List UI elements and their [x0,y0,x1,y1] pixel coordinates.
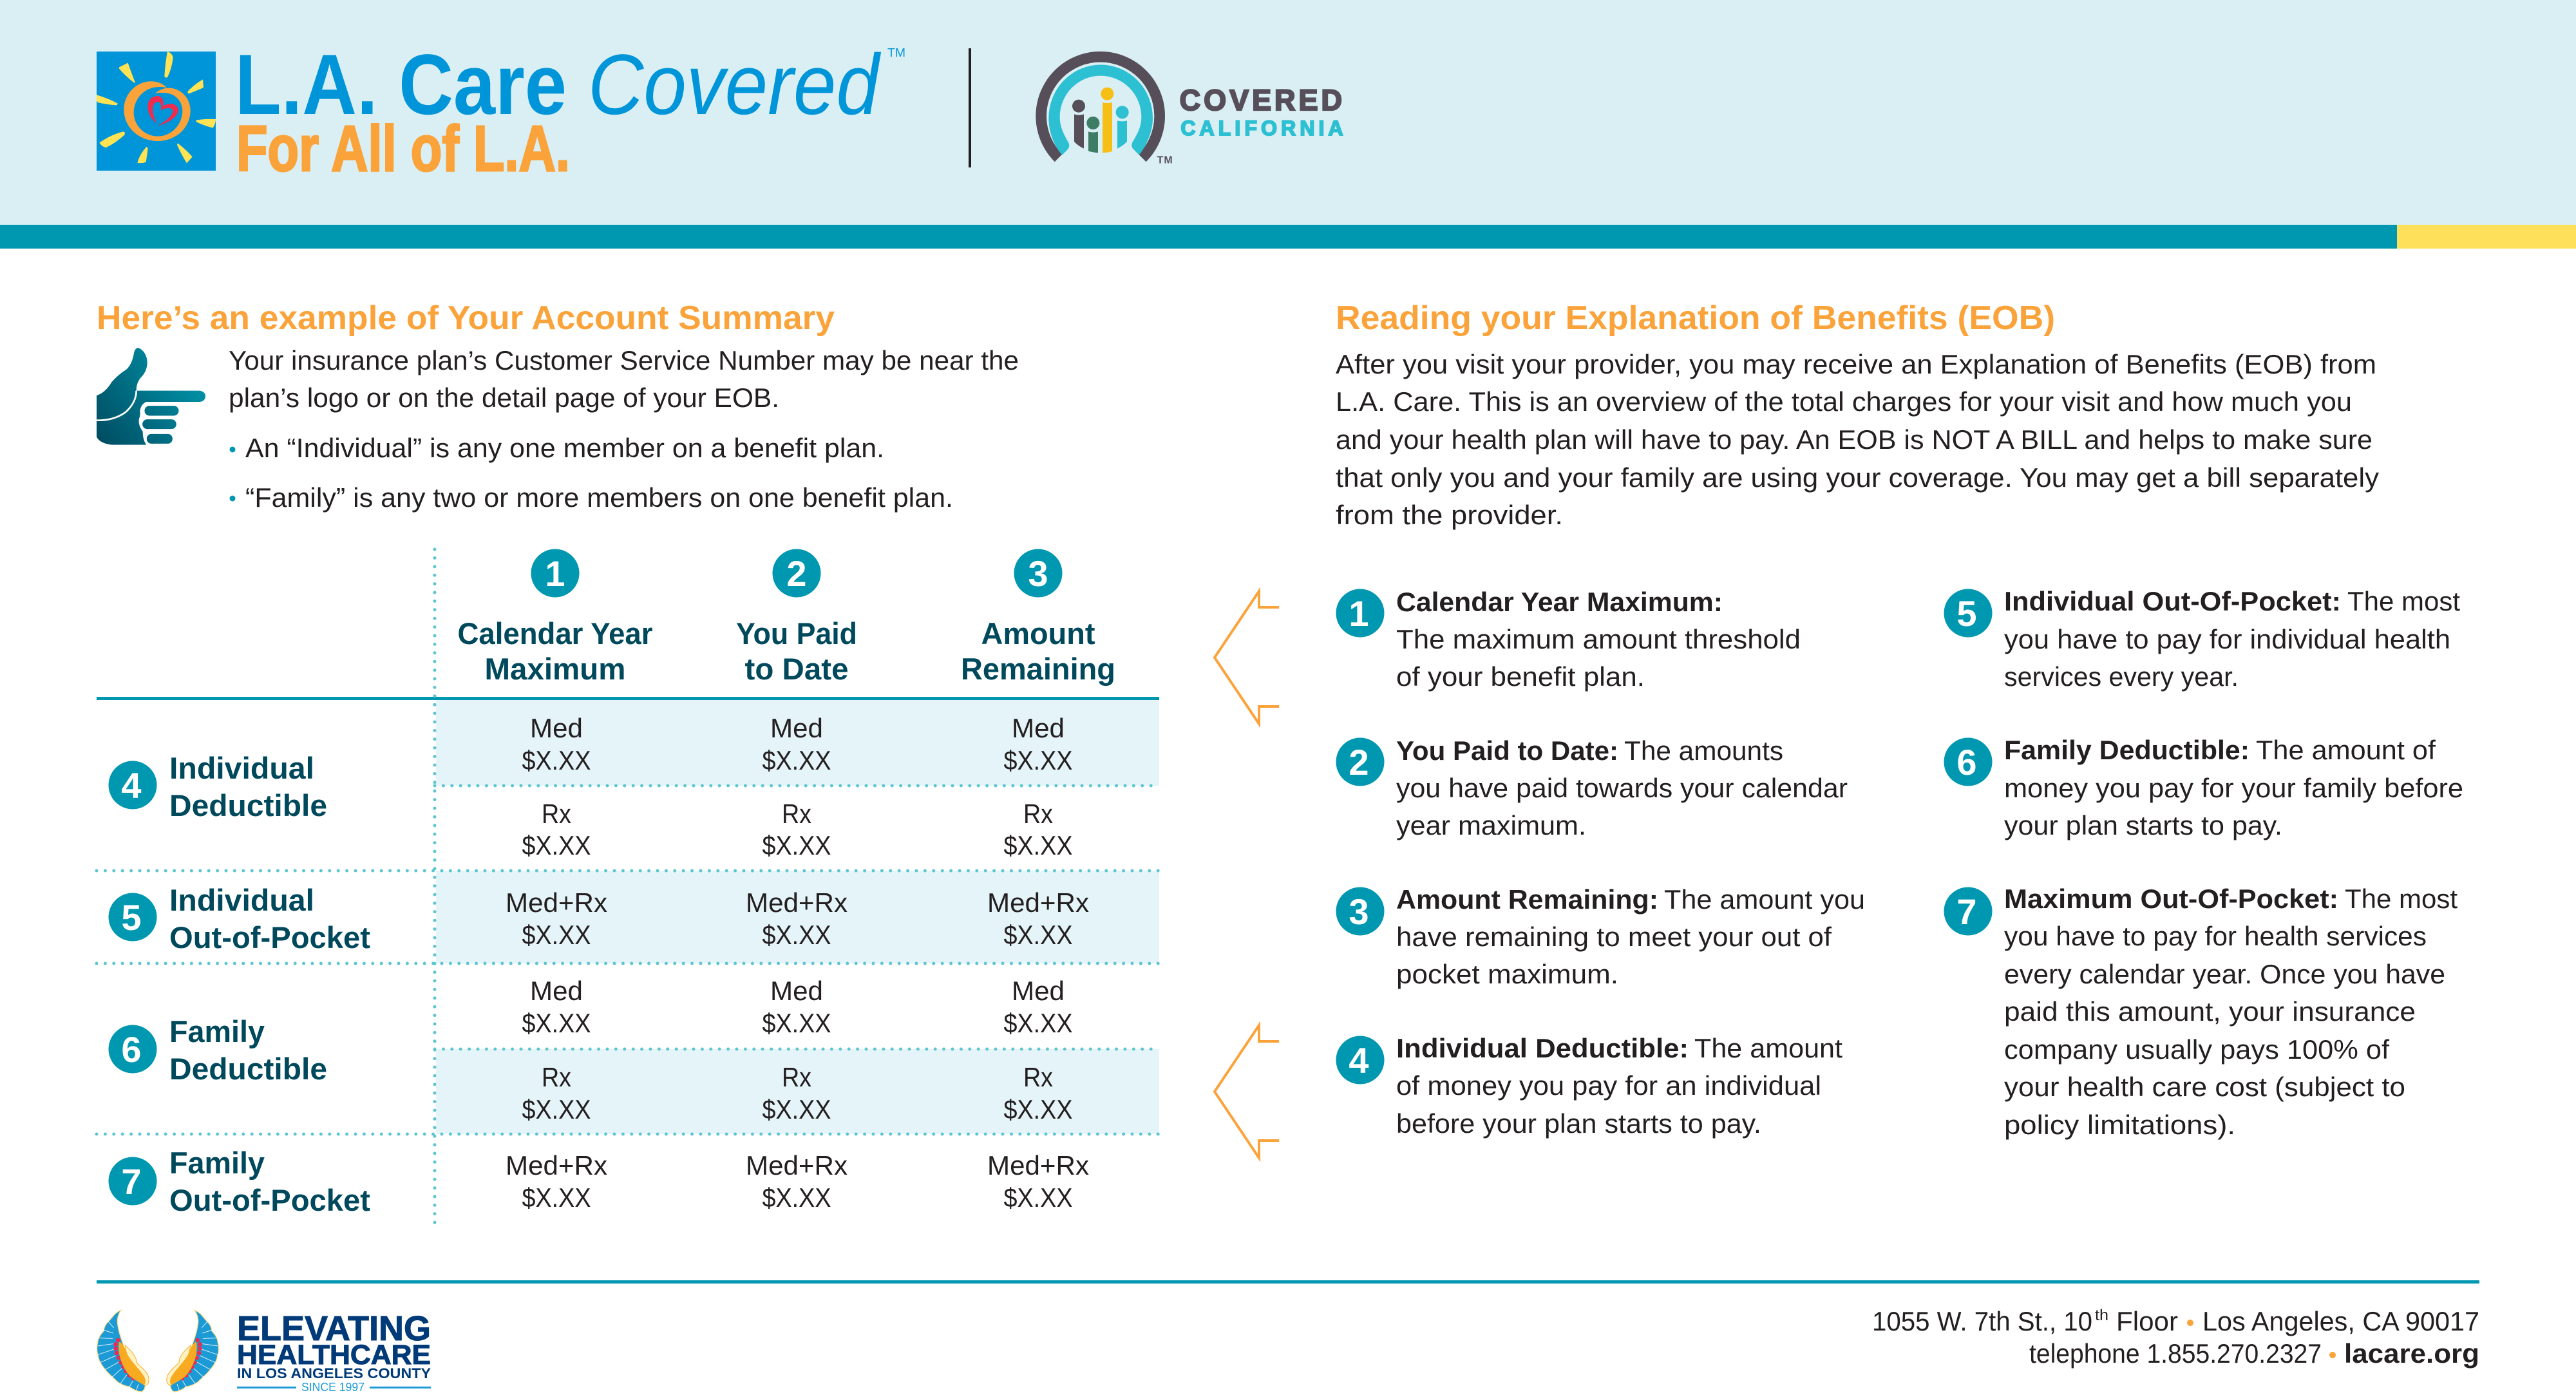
definition 3: amount remaining: The amount you [1664,884,1865,914]
definition 4: individual deductible [1336,1033,1842,1139]
panel: reading your EOB [1336,299,2463,1140]
table values: row 4 medical: $X.XX [762,745,831,775]
icon: L.A. Care sun logo [97,52,216,171]
table values: row 5: $X.XX [762,920,831,950]
table values: row 4 medical [522,713,1073,775]
row label: family out-of-pocket [108,1146,370,1217]
text: address: Floor [2116,1306,2178,1336]
definition 7: maximum out-of-pocket: company usually pays 100% of [2004,1034,2389,1065]
row label: individual deductible: 4 [121,765,142,806]
definition 6: family deductible: 6 [1956,742,1977,782]
definition 6: family deductible: money you pay for your family before [2004,773,2463,803]
definition 2: you paid to date: The amounts [1624,735,1783,766]
row label: family out-of-pocket: 7 [121,1161,142,1202]
text: address: Los Angeles, CA 90017 [2202,1306,2479,1336]
logo wordmark: L.A. Care Covered: L.A. Care [235,37,567,133]
definition 5: individual out-of-pocket [1944,586,2460,692]
column header: you paid to date: You Paid [736,616,857,650]
definition 5: individual out-of-pocket: The most [2347,586,2460,616]
definition 2: you paid to date: You Paid to Date: [1396,735,1618,766]
definition 5: individual out-of-pocket: you have to pay for individual health [2004,624,2450,654]
logo text: elevating healthcare: ELEVATING [237,1309,431,1348]
row label: family deductible [108,1014,327,1086]
icon: wings [97,1310,219,1392]
logo tagline: For All of L.A.: For All of L.A. [236,113,570,185]
definition 6: family deductible: The amount of [2256,735,2436,765]
row label: individual out-of-pocket: Individual [169,883,314,917]
definition 1: calendar year maximum: 1 [1349,593,1369,634]
table values: row 4 prescription: Rx [782,799,811,829]
definition 5: individual out-of-pocket: services every year. [2004,661,2239,692]
table values: row 4 medical: $X.XX [522,745,591,775]
definition 5: individual out-of-pocket: 5 [1956,593,1977,634]
text: EOB introduction [1336,349,2379,530]
text: EOB introduction: from the provider. [1336,500,1563,530]
table values: row 4 medical: Med [1012,713,1065,743]
text: customer service note: plan’s logo or on the detail page of your EOB. [229,383,779,413]
column header: calendar year maximum: 1 [545,553,565,594]
definition 2: you paid to date: 2 [1349,742,1369,782]
column header: amount remaining [961,549,1115,686]
text: customer service note [229,345,1019,413]
definition 7: maximum out-of-pocket: you have to pay for health services [2004,921,2427,951]
definition 3: amount remaining: 3 [1349,891,1369,932]
table values: row 4 prescription: $X.XX [1003,830,1073,860]
logo wordmark: L.A. Care Covered: TM [887,46,905,59]
definition 7: maximum out-of-pocket [1944,884,2458,1140]
definition 7: maximum out-of-pocket: policy limitations). [2004,1110,2235,1140]
column header: calendar year maximum: Calendar Year [457,616,653,650]
table values: row 6 medical: $X.XX [762,1008,831,1038]
definition 7: maximum out-of-pocket: your health care cost (subject to [2004,1072,2405,1102]
table values: row 6 medical: Med [530,976,583,1006]
text: EOB introduction: L.A. Care. This is an overview of the total charges for your visit and how much you [1336,386,2352,417]
column header: you paid to date [736,549,857,686]
definition 6: family deductible: Family Deductible: [2004,735,2249,765]
header band [0,0,2576,249]
table values: row 7: Med+Rx [506,1150,607,1180]
table values: row 6 medical: Med [1012,976,1065,1006]
column header: amount remaining: Remaining [961,652,1115,686]
table values: row 7 [506,1150,1089,1213]
logo: Covered California: CALIFORNIA [1180,117,1343,140]
definition 1: calendar year maximum [1336,587,1801,692]
text: EOB introduction: After you visit your provider, you may receive an Explanation of Benefits (EOB) from [1336,349,2376,379]
definition 3: amount remaining: Amount Remaining: [1396,884,1658,914]
row label: individual deductible: Individual [169,751,314,785]
definition 7: maximum out-of-pocket: Maximum Out-Of-Pocket: [2004,884,2338,914]
text: telephone and website [2029,1338,2479,1369]
definition 4: individual deductible: The amount [1694,1033,1842,1063]
table values: row 5: $X.XX [522,920,591,950]
definition 3: amount remaining [1336,884,1865,989]
row label: individual deductible: Deductible [169,788,327,822]
column header: amount remaining: Amount [981,616,1095,650]
column header: you paid to date: to Date [744,652,849,686]
table values: row 6 medical [522,976,1073,1038]
bullet: family definition: “Family” is any two or more members on one benefit plan. [245,482,953,513]
table values: row 4 medical: Med [530,713,583,743]
table values: row 4 prescription: Rx [1023,799,1053,829]
table values: row 6 prescription: $X.XX [1003,1094,1073,1124]
definition 2: you paid to date [1336,735,1848,840]
column header: calendar year maximum [457,549,653,686]
heading: account summary: Here’s an example of Your Account Summary [97,299,835,337]
table values: row 6 medical: $X.XX [522,1008,591,1038]
table values: row 7: $X.XX [762,1182,831,1213]
logo text: elevating healthcare: HEALTHCARE [237,1340,431,1370]
table values: row 4 medical: Med [770,713,823,743]
definition 7: maximum out-of-pocket: paid this amount, your insurance [2004,996,2416,1027]
definition 1: calendar year maximum: Calendar Year Maximum: [1396,587,1723,617]
table values: row 6 prescription: Rx [782,1062,811,1092]
table values: row 4 prescription: $X.XX [522,830,591,860]
definition 6: family deductible: your plan starts to pay. [2004,810,2282,840]
table values: row 7: Med+Rx [746,1150,848,1180]
definition 3: amount remaining: pocket maximum. [1396,959,1618,989]
table values: row 7: $X.XX [1003,1182,1073,1213]
bullet: individual definition: An “Individual” is any one member on a benefit plan. [245,433,884,463]
text: EOB introduction: that only you and your family are using your coverage. You may get a bill separately [1336,462,2379,493]
table values: row 6 medical: $X.XX [1003,1008,1073,1038]
logo: Covered California: TM [1157,155,1173,166]
table values: row 4 prescription [522,799,1073,860]
definition 1: calendar year maximum: The maximum amount threshold [1396,624,1801,654]
column header: calendar year maximum: Maximum [484,652,626,686]
text: customer service note: Your insurance plan’s Customer Service Number may be near the [229,345,1019,375]
panel: account summary [97,299,1159,1227]
logo: Covered California [1041,57,1343,166]
row label: individual out-of-pocket: Out-of-Pocket [169,920,370,954]
arrow: upper callout to table [1215,591,1279,724]
row label: family out-of-pocket: Family [169,1146,265,1180]
table values: row 4 prescription: $X.XX [762,830,831,860]
table: account summary [97,549,1159,1227]
logo wordmark: L.A. Care Covered [235,37,905,133]
column header: amount remaining: 3 [1028,553,1048,594]
logo text: elevating healthcare [237,1309,431,1393]
table values: row 6 prescription: Rx [1023,1062,1053,1092]
text: telephone and website: telephone 1.855.270.2327 [2029,1338,2322,1369]
table values: row 6 prescription [522,1062,1073,1124]
table values: row 6 prescription: $X.XX [762,1094,831,1124]
heading: reading your EOB: Reading your Explanation of Benefits (EOB) [1336,299,2055,337]
table values: row 7: $X.XX [522,1182,591,1213]
table values: row 6 medical: Med [770,976,823,1006]
row label: family deductible: Deductible [169,1052,327,1086]
text: address: th [2095,1307,2108,1324]
row label: family deductible: Family [169,1014,265,1048]
row label: family out-of-pocket: Out-of-Pocket [169,1183,370,1217]
definition 6: family deductible [1944,735,2463,840]
table values: row 5: Med+Rx [987,887,1089,918]
row label: individual out-of-pocket [108,883,370,954]
table values: row 6 prescription: Rx [542,1062,571,1092]
logo: Covered California: COVERED [1180,84,1342,117]
definition 7: maximum out-of-pocket: every calendar year. Once you have [2004,959,2445,989]
table values: row 5: Med+Rx [506,887,607,918]
arrow: lower callout to table [1215,1025,1279,1158]
definition 4: individual deductible: 4 [1349,1040,1369,1081]
row label: individual out-of-pocket: 5 [121,897,142,938]
definition 4: individual deductible: before your plan starts to pay. [1396,1108,1761,1139]
definition 4: individual deductible: of money you pay for an individual [1396,1070,1821,1101]
definition 2: you paid to date: you have paid towards your calendar [1396,773,1848,803]
text: telephone and website: lacare.org [2344,1338,2479,1369]
row label: individual deductible [108,751,327,822]
table values: row 5: $X.XX [1003,920,1073,950]
definition 7: maximum out-of-pocket: 7 [1956,891,1977,932]
footer [97,1280,2479,1393]
definition 5: individual out-of-pocket: Individual Out-Of-Pocket: [2004,586,2341,616]
column header: you paid to date: 2 [786,553,807,594]
definition 3: amount remaining: have remaining to meet your out of [1396,922,1832,952]
definition 4: individual deductible: Individual Deductible: [1396,1033,1689,1063]
text: address [1872,1306,2479,1336]
logo wordmark: L.A. Care Covered: Covered [588,37,882,133]
definition 7: maximum out-of-pocket: The most [2345,884,2458,914]
table values: row 6 prescription: $X.XX [522,1094,591,1124]
icon: pointing hand [97,348,205,445]
table values: row 4 medical: $X.XX [1003,745,1073,775]
table values: row 4 prescription: Rx [542,799,571,829]
definition 2: you paid to date: year maximum. [1396,810,1586,840]
text: EOB introduction: and your health plan will have to pay. An EOB is NOT A BILL and helps to make sure [1336,424,2372,455]
definition 1: calendar year maximum: of your benefit plan. [1396,661,1645,692]
text: address: 1055 W. 7th St., 10 [1872,1306,2092,1336]
table values: row 5 [506,887,1089,950]
table values: row 7: Med+Rx [987,1150,1089,1180]
logo text: elevating healthcare: IN LOS ANGELES COUNTY [237,1365,431,1381]
table values: row 5: Med+Rx [746,887,848,918]
row label: family deductible: 6 [121,1029,142,1070]
